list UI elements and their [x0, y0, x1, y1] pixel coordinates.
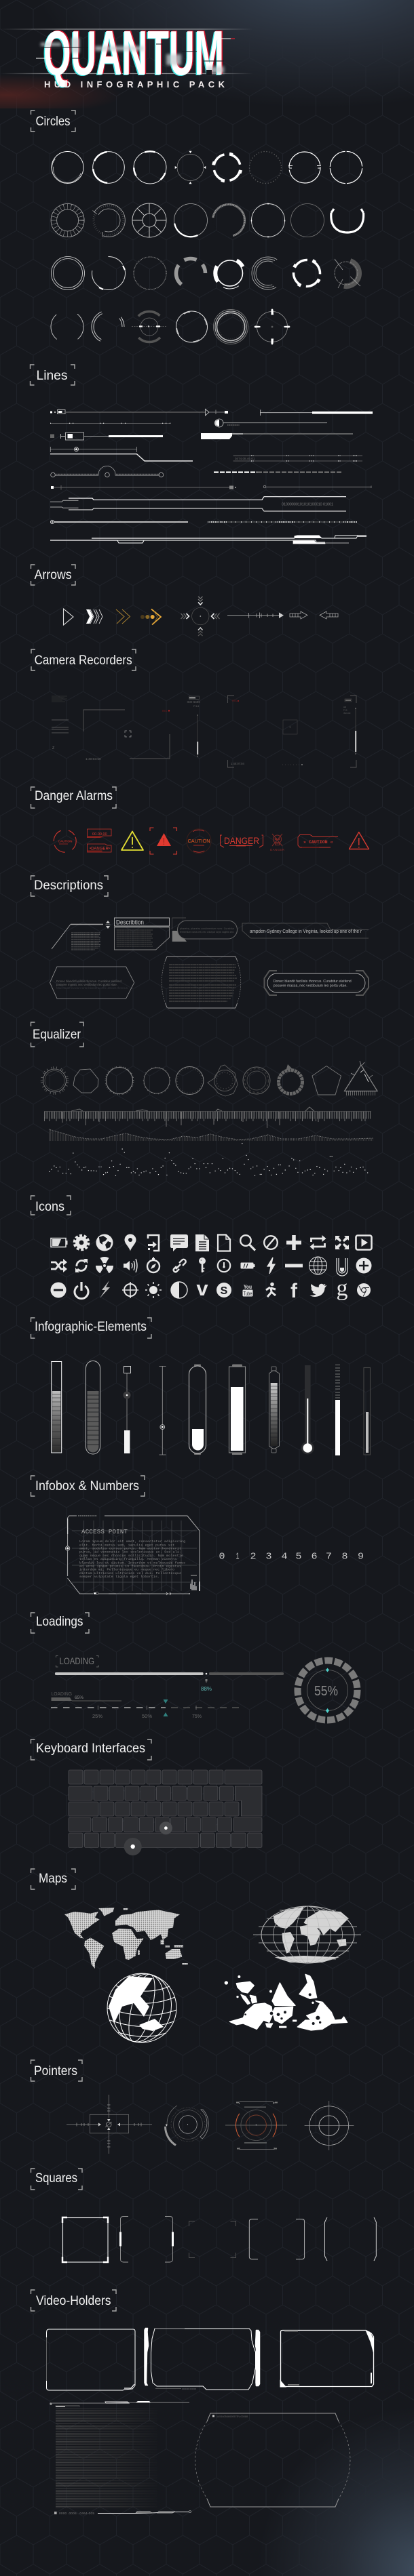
icon: bolt	[100, 1281, 110, 1298]
heading: Circles: Circles	[35, 115, 71, 129]
gauge 6: battery	[229, 1364, 246, 1455]
icon: expand	[335, 1236, 349, 1249]
alarm: caution circle	[187, 829, 211, 853]
heading: Danger Alarms: Danger Alarms	[35, 789, 113, 803]
heading: Camera Recorders: Camera Recorders	[35, 653, 132, 668]
loading bar 1: 88%	[201, 1686, 212, 1692]
icon row 2	[51, 1257, 372, 1276]
gauge 4: thin ruler	[159, 1367, 166, 1455]
camera recorder frame 1: ISO 6400	[187, 700, 200, 704]
section: Equalizer	[31, 1022, 377, 1175]
section: Lines	[30, 365, 373, 544]
info box body text: tellus et adipiscing fringilla. Aenean viverra	[79, 1557, 176, 1561]
description E: hexagon panel: Maecenas tincidunt ante blandit ac orci ultricies rhoncus.	[56, 986, 128, 990]
icon: facebook: f	[290, 1280, 298, 1302]
map: dotted world	[64, 1908, 188, 1969]
icon: blank page	[218, 1235, 230, 1251]
info box body text: quam neque nec rhoncus sollicitudin. Nam molestie	[79, 1554, 183, 1558]
video holder 3	[281, 2331, 373, 2386]
camera recorder frame 2: 1:40:07:04	[231, 762, 244, 765]
loading bar 2	[52, 1691, 121, 1701]
icon: youtube: You	[244, 1284, 252, 1290]
loading bar 2: 65%	[75, 1695, 83, 1700]
heading: Icons	[31, 1196, 71, 1215]
info box: access point	[65, 1516, 200, 1595]
icon: twitter	[309, 1284, 327, 1297]
digital numbers: 2	[250, 1551, 257, 1562]
icon: youtube: Tube	[243, 1291, 252, 1297]
icon row 1	[51, 1234, 372, 1251]
digital numbers: 7	[326, 1551, 332, 1562]
heading: Infobox & Numbers	[31, 1476, 145, 1496]
description C: pill panel	[172, 918, 238, 942]
heading: Loadings	[31, 1613, 89, 1633]
heading: Keyboard Interfaces: Keyboard Interfaces	[36, 1742, 145, 1756]
title block	[0, 17, 253, 89]
heading: Descriptions	[31, 876, 108, 896]
info box body text: Lorem ipsum dolor sit amet, consectetur adipiscing	[79, 1539, 185, 1544]
alarm: caution tag: » CAUTION «	[303, 840, 333, 845]
heading: Maps: Maps	[39, 1872, 67, 1886]
loading bar 3: dashed scale	[51, 1699, 244, 1719]
icon: search	[240, 1235, 255, 1250]
heading: Descriptions: Descriptions	[34, 879, 103, 893]
info box body text: blandit leo ut dictum. Interdum et malesuada fames	[79, 1561, 185, 1565]
info box title: ACCESS POINT	[81, 1529, 128, 1535]
line row 7: twin traces: 01000000101010100010 01001	[282, 503, 333, 507]
section: Icons	[31, 1196, 372, 1302]
camera recorder frame 2: F1.6	[343, 709, 347, 712]
pointer 1: target box	[67, 2095, 152, 2154]
description C: pill panel: pharetra, pharetra condimentum nunc. Curabitur	[180, 927, 235, 930]
section: Camera Recorders	[31, 649, 356, 767]
line row 7: twin traces	[50, 497, 346, 511]
icon: runner	[266, 1283, 276, 1297]
keyboard touch points	[124, 1822, 172, 1855]
digital numbers: 0	[219, 1551, 225, 1562]
video holder 5: barrel frame: 14516054600057EV.00088	[217, 2415, 248, 2418]
section: Infobox & Numbers	[31, 1476, 364, 1595]
info box body text: ac ante ipsum primis in faucibus. Proin egestas	[79, 1565, 181, 1569]
description G: framed pill: Donec blandit facilisis rhoncus. Curabitur eleifend	[274, 980, 352, 984]
heading: Lines: Lines	[37, 369, 68, 383]
line row 1	[50, 409, 373, 416]
square 1: white corners	[62, 2217, 108, 2262]
gauge 5: test tube	[189, 1364, 206, 1455]
heading: Lines	[30, 365, 75, 385]
circle row 3	[52, 256, 360, 290]
icon: plus circle	[356, 1258, 372, 1273]
icon: bolt outline	[267, 1257, 275, 1274]
loading bar 3: dashed scale: 50%	[142, 1713, 152, 1719]
icon: skype: S	[221, 1285, 228, 1297]
gauge 8: thermometer	[301, 1365, 314, 1455]
section: Infographic-Elements	[31, 1318, 371, 1455]
digital numbers: 5	[296, 1551, 301, 1562]
section: Loadings	[31, 1613, 357, 1720]
heading: Icons: Icons	[35, 1200, 64, 1214]
section: Keyboard Interfaces	[31, 1739, 262, 1855]
heading: Camera Recorders	[31, 649, 136, 670]
line row 4: 0474.08.46.01	[235, 457, 255, 460]
radial loader 55%: 55%	[314, 1684, 338, 1699]
icon: sign in	[148, 1235, 159, 1251]
icon: chrome	[357, 1283, 371, 1297]
icon: document	[195, 1234, 209, 1251]
alarm: skull and crossbones	[270, 834, 285, 851]
heading: Video-Holders	[31, 2290, 116, 2311]
heading: Infobox & Numbers: Infobox & Numbers	[35, 1479, 139, 1493]
alarm: caution ring	[54, 830, 76, 852]
radial loader 55%	[297, 1661, 357, 1720]
video holder 2: 0000000 000000	[182, 2388, 196, 2390]
icon: compass stopwatch	[147, 1257, 159, 1272]
icon: sun	[145, 1282, 162, 1298]
title block: QUANTUM	[42, 18, 223, 89]
pointer 3: orange scope	[225, 2102, 287, 2150]
line row 4	[50, 447, 362, 461]
map: flat globe with grid	[253, 1906, 361, 1963]
waveform bars	[44, 1107, 371, 1128]
alarm: caution tag	[298, 835, 338, 847]
icon: youtube	[243, 1284, 252, 1297]
section: Maps	[31, 1869, 361, 2049]
alarm: skull and crossbones: DANGER	[270, 848, 285, 851]
icon: battery	[51, 1238, 68, 1247]
video holder 2	[144, 2328, 260, 2390]
scatter dots equalizer	[50, 1144, 368, 1175]
description G: framed pill	[265, 971, 369, 995]
info box body text: amet, sodales cursus purus. Nam auctor hendrerit	[79, 1547, 181, 1551]
circle row 4	[51, 309, 290, 344]
description D: ticker panel	[242, 923, 369, 938]
icon: radiation	[99, 1260, 110, 1272]
icon: web globe	[309, 1257, 327, 1274]
alarm: caution ring: CAUTION	[58, 839, 73, 843]
pointer 2: orbit scope	[166, 2106, 208, 2145]
square 5: curved sides	[324, 2217, 376, 2261]
description A: angled panel	[52, 921, 110, 950]
icon: gear	[75, 1235, 88, 1250]
digital numbers: 4	[281, 1551, 288, 1562]
icon row 3	[50, 1276, 371, 1302]
camera recorder frame 1: F 5.6	[193, 705, 199, 708]
heading: Equalizer	[31, 1022, 83, 1047]
circle row 1	[52, 151, 362, 184]
gauge 7: tapered capsule	[269, 1367, 280, 1453]
section: Danger Alarms	[31, 787, 369, 854]
description C: pill panel: fermentum varius elit, nec volutpat turpis sagittis sed.	[180, 931, 234, 933]
icon: shuffle	[51, 1259, 67, 1272]
description E: hexagon panel	[50, 967, 134, 999]
description D: ticker panel: ampden-Sydney College in Virginia, looked up one of the r	[250, 929, 362, 934]
line row 5	[51, 466, 343, 477]
gauge 10: narrow column	[364, 1368, 371, 1455]
line row 2	[50, 419, 327, 427]
icon: power	[75, 1282, 88, 1299]
section: Arrows	[31, 565, 338, 636]
info box body text: semper vulputate ligula eget lobortis.	[79, 1575, 159, 1579]
video holder 4: scan lines	[50, 2401, 191, 2516]
heading: Pointers	[31, 2060, 82, 2081]
description G: framed pill: posuere massa, nec vestibulum leo porta vitae.	[274, 984, 347, 988]
waveform dotted envelope	[49, 1129, 373, 1140]
icon: crosshair	[122, 1282, 138, 1298]
description E: hexagon panel: posuere massa, nec vestibulum leo porta vitae.	[56, 983, 117, 986]
alarm: caution circle: CAUTION	[187, 838, 210, 844]
info box body text: dictum ultricies ultricies vel dui. Pellentesque	[79, 1571, 181, 1575]
square 2: side bars	[121, 2217, 172, 2262]
icon: gauge	[218, 1260, 230, 1272]
digital numbers	[219, 1551, 364, 1562]
heading: Video-Holders: Video-Holders	[36, 2294, 111, 2308]
square 4: bracket pair	[249, 2219, 305, 2259]
loading bar 1: LOADING	[60, 1656, 94, 1666]
arrow: amber double chevron	[116, 609, 130, 624]
heading: Danger Alarms	[31, 787, 116, 808]
video holder 1	[46, 2329, 135, 2390]
alarm: timer and danger tags: •DANGER•	[90, 847, 110, 851]
camera recorder frame 1: REC	[162, 710, 168, 712]
icon: small battery	[240, 1262, 255, 1269]
icon: skype	[217, 1283, 231, 1297]
arrow: tick line	[227, 613, 284, 618]
camera recorder frame 2: REC	[232, 700, 238, 702]
loading bar 3: dashed scale: 25%	[92, 1713, 102, 1719]
gauge 3: slider with bar	[124, 1367, 130, 1453]
alarm: timer and danger tags: 00.00.00	[92, 832, 107, 837]
gauge 2: capsule	[86, 1361, 100, 1454]
icon: chat	[170, 1234, 188, 1251]
icon: half circle	[171, 1282, 187, 1298]
square 3: small corners	[189, 2221, 236, 2257]
loading bar 2: LOADING	[52, 1691, 72, 1697]
digital numbers: 3	[266, 1551, 271, 1562]
arrow: block left	[320, 611, 338, 619]
heading: Maps	[31, 1869, 75, 1889]
section: Pointers	[31, 2060, 354, 2154]
icon: repeat	[309, 1235, 326, 1250]
loading bar 3: dashed scale: 75%	[192, 1713, 202, 1719]
arrow: amber dots and chevron	[140, 609, 161, 625]
camera recorder frame 1: Z	[52, 746, 54, 750]
camera recorder frame 1: 1:40:03:50	[86, 757, 101, 761]
arrow: white triple chevrons	[86, 609, 102, 624]
heading: Loadings: Loadings	[36, 1615, 83, 1629]
alarm: timer and danger tags	[87, 829, 111, 852]
heading: Pointers: Pointers	[34, 2064, 77, 2078]
keyboard	[69, 1770, 262, 1848]
alarm: yellow warning triangle	[121, 831, 143, 850]
digital numbers: 1	[236, 1551, 239, 1562]
heading: Arrows: Arrows	[35, 568, 72, 582]
section: Video-Holders	[31, 2290, 373, 2516]
camera recorder frame 1	[52, 696, 200, 761]
alarm: red outlined triangle	[349, 832, 369, 849]
icon: volume	[124, 1259, 137, 1272]
heading: Circles	[31, 110, 75, 132]
title: QUANTUM: QUANTUM	[43, 18, 224, 88]
heading: Squares: Squares	[35, 2171, 77, 2186]
icon: link	[174, 1260, 186, 1272]
icon: key	[199, 1257, 206, 1272]
icon: ban	[264, 1236, 278, 1249]
info box body text: interdum mi. Pellentesque eu neque nec libero	[79, 1568, 174, 1572]
subtitle: HUD INFOGRAPHIC PACK	[44, 79, 225, 89]
heading: Equalizer: Equalizer	[33, 1028, 81, 1042]
digital numbers: 9	[358, 1551, 364, 1562]
icon: minus circle	[50, 1283, 67, 1297]
icon: earth	[96, 1234, 113, 1251]
heading: Arrows	[31, 565, 75, 585]
digital numbers: 6	[311, 1551, 318, 1562]
info box body text	[79, 1539, 185, 1579]
circular equalizers	[42, 1061, 377, 1096]
line row 9	[50, 536, 366, 544]
icon: minus	[285, 1264, 303, 1268]
heading: Keyboard Interfaces	[31, 1739, 151, 1760]
arrow: block right	[290, 611, 307, 619]
map: wireframe globe	[105, 1967, 178, 2049]
icon: plus	[286, 1235, 301, 1250]
camera recorder frame 2: ISO 100	[343, 712, 351, 715]
section: Squares	[31, 2169, 376, 2262]
icon: map pin	[125, 1234, 136, 1251]
heading: Infographic-Elements: Infographic-Elements	[35, 1320, 147, 1334]
icon: google: g	[337, 1276, 347, 1301]
info box body text: purus, id venenatis leo scelerisque ac. Sed ali-	[79, 1550, 181, 1554]
loading bar 1	[55, 1655, 284, 1692]
title block: QUANTUM	[45, 17, 225, 87]
description F: barrel panel	[162, 957, 241, 1008]
icon: sync	[75, 1259, 88, 1272]
camera recorder frame 2	[227, 696, 356, 767]
alarm: danger banner: DANGER	[224, 836, 259, 846]
section: Circles	[31, 110, 364, 344]
line row 6	[51, 485, 371, 489]
line row 8	[50, 521, 357, 523]
description B: titled panel	[114, 918, 170, 950]
heading: Squares	[31, 2169, 82, 2190]
map: hex tile world	[225, 1974, 347, 2030]
icon: play box	[356, 1235, 372, 1250]
circle row 2	[51, 203, 364, 237]
arrow: outline triangle	[64, 609, 73, 625]
video holder 4: scan lines: 0000 .0006 . 0464-005	[59, 2512, 94, 2516]
gauge 9: ticks and bar	[335, 1365, 340, 1455]
pointer 4: crosshair	[305, 2101, 354, 2150]
camera recorder frame 2: HD	[343, 706, 346, 708]
description E: hexagon panel: Donec blandit facilisis rhoncus. Curabitur eleifend	[56, 980, 121, 983]
info box body text: elit. Morbi metus sem, iaculis eget purus sit	[79, 1543, 174, 1547]
heading: Infographic-Elements	[31, 1318, 151, 1338]
video holder 5: barrel frame	[195, 2413, 350, 2507]
gauge 1: segmented column	[52, 1361, 62, 1453]
alarm: red filled triangle in brackets	[150, 828, 176, 854]
icon: test tube	[337, 1258, 347, 1276]
icon: vimeo: v	[196, 1276, 208, 1300]
digital numbers: 8	[342, 1551, 347, 1562]
section: Descriptions	[31, 876, 369, 1008]
arrow: target with converging chevrons	[181, 597, 220, 636]
line row 3	[50, 432, 353, 440]
description B: titled panel: Describtion	[116, 919, 144, 926]
